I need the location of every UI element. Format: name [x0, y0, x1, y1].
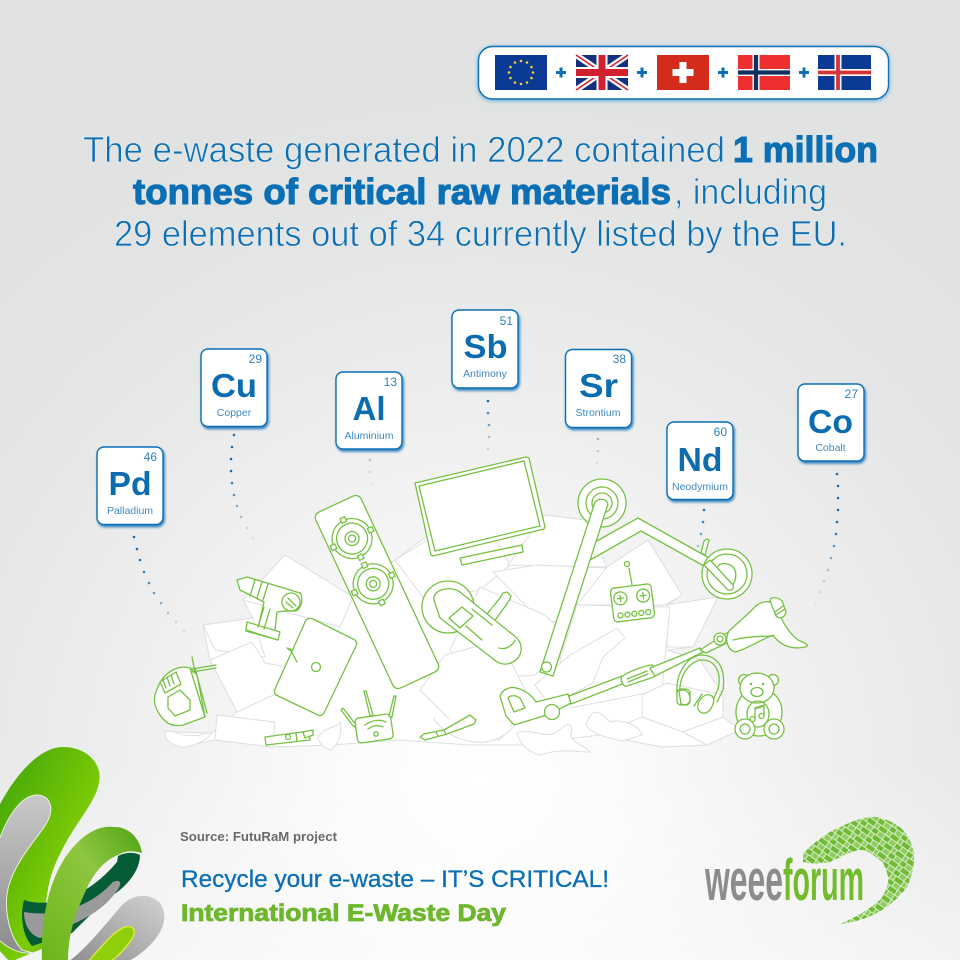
- dotted connectors: [133, 400, 839, 632]
- flag: European Union: [495, 55, 547, 90]
- icon: remote control: [610, 562, 655, 622]
- headline: 29 elements out of 34 currently listed by the EU.: [114, 213, 847, 254]
- element card: Palladium: [97, 447, 163, 524]
- WEEE Forum logo: weee: [704, 848, 783, 913]
- grey debris heap: [165, 515, 740, 755]
- element card: Aluminium: [336, 372, 402, 449]
- element card: Copper: 29: [249, 352, 262, 366]
- element card: Palladium: 46: [144, 450, 157, 464]
- headline: tonnes of critical raw materials: [133, 171, 671, 212]
- element card: Aluminium: 13: [384, 375, 397, 389]
- headline: The e-waste generated in 2022 contained: [83, 129, 725, 170]
- brand swoosh logo: [0, 747, 164, 960]
- headline: 1 million: [733, 129, 878, 170]
- flags panel: [478, 46, 888, 99]
- icon: teddy bear: [735, 673, 784, 739]
- icon: electric toothbrush: [420, 715, 476, 740]
- element card: Copper: [201, 349, 267, 426]
- element card: Cobalt: 27: [845, 387, 858, 401]
- flag: Switzerland: [657, 55, 709, 90]
- icon: headphones: [677, 655, 724, 713]
- element card: Cobalt: Cobalt: [815, 442, 846, 454]
- element card: Neodymium: 60: [714, 425, 727, 439]
- element card: Palladium: Pd: [108, 465, 152, 502]
- event name: International E-Waste Day: [181, 900, 507, 927]
- headline: , including: [674, 171, 827, 212]
- element card: Palladium: Palladium: [107, 505, 153, 517]
- element card: Cobalt: Co: [808, 403, 853, 440]
- element card: Copper: Copper: [217, 407, 252, 419]
- element card: Aluminium: Aluminium: [344, 430, 394, 442]
- flag: Norway: [738, 55, 790, 90]
- element card: Antimony: Sb: [464, 328, 508, 365]
- icon: angle grinder: [422, 581, 521, 664]
- icon: television: [415, 457, 545, 565]
- icon: laser level: [154, 657, 216, 725]
- call to action: Recycle your e-waste – IT’S CRITICAL!: [181, 866, 609, 893]
- WEEE Forum logo: forum: [783, 848, 864, 913]
- flag: United Kingdom: [576, 55, 628, 90]
- element card: Neodymium: [667, 422, 733, 500]
- WEEE Forum logo: [704, 817, 914, 924]
- element card: Antimony: 51: [500, 314, 513, 328]
- element card: Strontium: Sr: [579, 367, 618, 404]
- icon: tablet: [274, 618, 357, 716]
- element card: Strontium: [566, 350, 632, 428]
- element card: Cobalt: [798, 384, 864, 461]
- plus sign: [799, 68, 809, 78]
- icon: wifi router: [341, 691, 396, 743]
- plus sign: [718, 68, 728, 78]
- element card: Antimony: [452, 310, 518, 388]
- flag: Iceland: [818, 55, 871, 90]
- plus sign: [556, 68, 566, 78]
- plus sign: [637, 68, 647, 78]
- element card: Neodymium: Neodymium: [672, 481, 728, 493]
- element card: Strontium: Strontium: [576, 407, 621, 419]
- element card: Copper: Cu: [211, 367, 257, 404]
- icon: gas hob: [313, 494, 441, 690]
- element card: Strontium: 38: [613, 352, 626, 366]
- headline: [83, 129, 878, 254]
- element card: Antimony: Antimony: [463, 368, 508, 380]
- element card: Aluminium: Al: [352, 390, 386, 427]
- e-waste pile illustration: [154, 457, 807, 755]
- source note: Source: FutuRaM project: [180, 829, 338, 844]
- icon: vape pen: [265, 730, 313, 745]
- icon: cordless drill: [237, 577, 302, 640]
- icon: electric scooter: [540, 479, 752, 676]
- element card: Neodymium: Nd: [678, 441, 722, 478]
- icon: metal detector / leaf blower: [500, 598, 807, 725]
